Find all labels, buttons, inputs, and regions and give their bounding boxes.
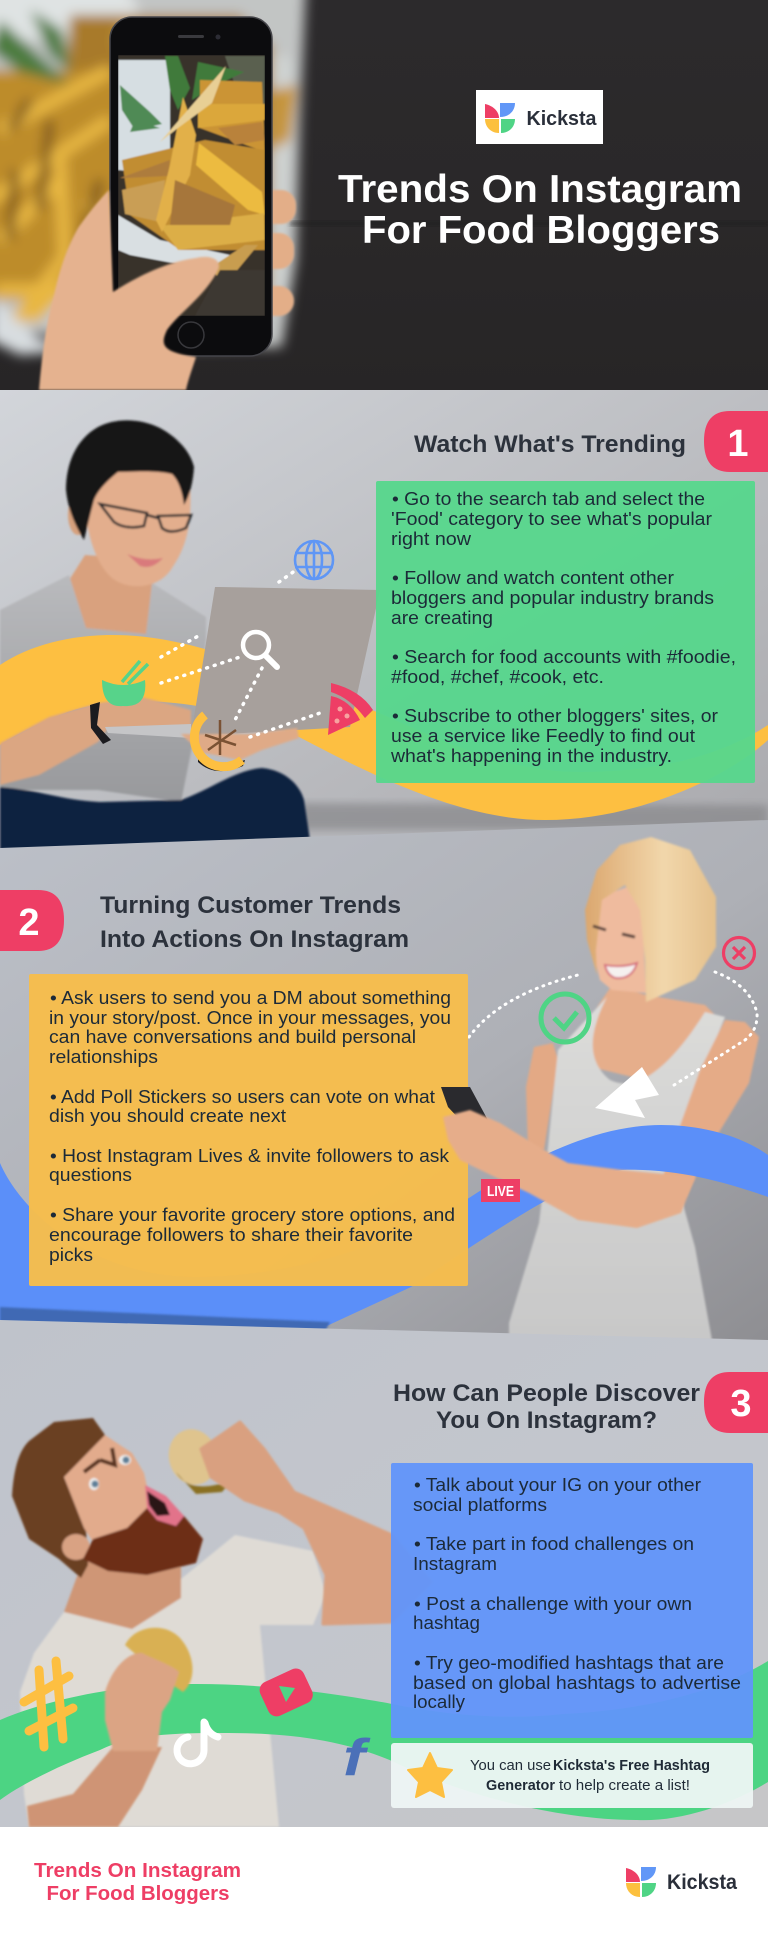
text box: green tips: use a service like Feedly to find out	[391, 726, 695, 746]
wrist band	[198, 755, 245, 771]
raised arm and hand	[201, 1422, 431, 1624]
irises	[92, 1456, 130, 1488]
icon: pizza slice	[328, 683, 373, 735]
text box: yellow tips: • Host Instagram Lives & invite followers to ask	[50, 1146, 450, 1166]
text box: green tips: are creating	[391, 608, 493, 628]
badge number 1	[704, 411, 768, 472]
woman smile	[605, 963, 637, 978]
text box: green tips: • Follow and watch content other	[392, 568, 674, 588]
phone	[110, 17, 272, 356]
badge number 3	[704, 1372, 768, 1433]
text box: green tips: • Search for food accounts with #foodie,	[392, 647, 736, 667]
text box: yellow tips: dish you should create next	[49, 1106, 286, 1126]
yellow wave	[0, 635, 768, 820]
jeans	[0, 768, 310, 860]
eyes	[89, 1455, 131, 1490]
callout text: Kicksta's Free Hashtag	[553, 1758, 710, 1774]
LIVE tag	[481, 1179, 520, 1202]
icon: star	[408, 1753, 452, 1797]
phone speaker and camera	[178, 35, 204, 38]
woman top	[509, 997, 725, 1340]
hand holding phone	[39, 190, 219, 390]
footer title	[34, 1860, 241, 1905]
woman left arm	[526, 1043, 558, 1150]
forearm	[27, 1747, 162, 1827]
text box: blue tips: hashtag	[413, 1613, 480, 1633]
section 3 background	[0, 1320, 768, 1830]
text box: blue tips: • Talk about your IG on your other	[414, 1475, 701, 1495]
text box: yellow tips: • Share your favorite grocery store options, and	[50, 1205, 455, 1225]
neck and chest	[66, 555, 154, 640]
text box: green tips: bloggers and popular industry brands	[391, 588, 714, 608]
heading: How Can People Discover	[393, 1380, 700, 1407]
shirt	[0, 575, 206, 802]
panel: section 1 watch what's trending	[0, 390, 768, 860]
text box: blue tips	[391, 1463, 753, 1738]
blurred plate of fries	[0, 0, 306, 355]
text box: blue tips: based on global hashtags to advertise	[413, 1673, 741, 1693]
phone body	[110, 17, 272, 356]
panel: section 2 customer trends	[0, 820, 768, 1345]
photo: woman body	[509, 837, 759, 1340]
badge number 1: 1	[727, 423, 749, 465]
phone screen with fries photo	[118, 55, 265, 316]
logo card	[476, 90, 603, 144]
text box: blue tips: Instagram	[413, 1554, 497, 1574]
other hand under laptop	[181, 728, 299, 760]
woman neck and chest	[575, 985, 720, 1085]
lower burger and hand	[27, 1628, 192, 1827]
text box: yellow tips: relationships	[49, 1047, 158, 1067]
text box: blue tips: • Try geo-modified hashtags that are	[414, 1653, 724, 1673]
text box: green tips: • Go to the search tab and select the	[392, 489, 705, 509]
logo wordmark: Kicksta	[526, 108, 597, 130]
blue wave	[0, 1125, 768, 1345]
icon: facebook f: f	[343, 1729, 371, 1787]
woman forearm and hand	[443, 1110, 695, 1228]
heading	[393, 1380, 700, 1434]
text box: green tips: 'Food' category to see what's popular	[391, 509, 712, 529]
woman upper arm	[656, 1020, 759, 1197]
icon: video play	[257, 1666, 316, 1719]
icon: globe	[295, 541, 333, 579]
text box: green tips	[376, 481, 755, 783]
wood plank seam	[290, 221, 768, 226]
panel: footer	[0, 1827, 768, 1934]
photo: bearded man	[12, 1418, 326, 1827]
footer background	[0, 1827, 768, 1934]
callout: hashtag generator	[391, 1743, 753, 1808]
text box: yellow tips: can have conversations and build personal	[49, 1027, 416, 1047]
panel: section 3 discover	[0, 1320, 768, 1830]
arm and hand on keyboard	[0, 697, 191, 785]
text box: yellow tips: encourage followers to share their favorite	[49, 1225, 413, 1245]
text box: yellow tips: in your story/post. Once in your messages, you	[49, 1008, 451, 1028]
neck	[64, 1560, 181, 1629]
green wave	[0, 1661, 768, 1820]
text box: blue tips: • Post a challenge with your own	[414, 1594, 692, 1614]
wristband	[90, 702, 111, 744]
icon: cross circle	[724, 938, 754, 968]
burger top	[163, 1424, 232, 1494]
hand	[105, 1653, 179, 1751]
ear	[68, 495, 88, 535]
ear	[62, 1534, 90, 1560]
callout text	[470, 1758, 710, 1794]
icon: bowl with chopsticks	[102, 661, 148, 706]
section 1 background	[0, 390, 768, 860]
dotted connector lines	[161, 570, 323, 737]
icon: music note	[177, 1722, 218, 1764]
eyebrows	[84, 1448, 115, 1472]
LIVE tag: LIVE	[487, 1183, 514, 1200]
text box: green tips: right now	[391, 529, 472, 549]
icon: lemon slice	[194, 715, 242, 767]
shirt	[20, 1535, 326, 1827]
photo: man torso and head	[0, 420, 310, 860]
smartphone in hand	[441, 1087, 497, 1138]
hair	[12, 1418, 105, 1578]
text box: green tips: what's happening in the industry.	[390, 746, 672, 766]
face	[82, 458, 190, 586]
footer Kicksta logo	[626, 1867, 737, 1897]
open mouth	[145, 1485, 184, 1526]
woman hair	[585, 837, 716, 1002]
text box: yellow tips	[29, 974, 468, 1286]
laptop	[105, 587, 380, 738]
title	[338, 168, 742, 252]
text box: blue tips: locally	[413, 1692, 465, 1712]
woman face	[590, 887, 646, 993]
badge number 3: 3	[730, 1383, 752, 1425]
text box: green tips: #food, #chef, #cook, etc.	[391, 667, 604, 687]
laptop base	[105, 724, 191, 738]
panel: header	[0, 0, 768, 390]
laptop lid	[191, 587, 380, 736]
heading: Watch What's Trending	[414, 431, 686, 458]
heading	[100, 892, 409, 953]
text box: blue tips: • Take part in food challenges on	[414, 1534, 694, 1554]
icon: magnifier	[243, 632, 277, 667]
callout text: Generator	[486, 1778, 555, 1794]
mouth interior	[147, 1491, 170, 1516]
icon: fingers behind phone	[258, 190, 296, 316]
wave shadow strip	[0, 1307, 330, 1345]
header dark wood background	[0, 0, 768, 390]
text box: yellow tips: • Ask users to send you a DM about something	[50, 988, 451, 1008]
heading: Turning Customer Trends	[100, 892, 401, 919]
footer title: Trends On Instagram	[34, 1860, 241, 1882]
badge number 2: 2	[18, 902, 40, 944]
mouth	[127, 554, 163, 567]
text box: yellow tips: picks	[49, 1245, 93, 1265]
icon: send arrow	[595, 1067, 659, 1118]
heading: You On Instagram?	[436, 1407, 657, 1434]
callout text: You can use	[470, 1758, 551, 1774]
text box: blue tips: social platforms	[413, 1495, 547, 1515]
glasses	[100, 504, 191, 532]
hair	[66, 420, 194, 540]
footer title: For Food Bloggers	[46, 1883, 229, 1905]
face	[64, 1435, 150, 1542]
dotted arcs	[469, 972, 757, 1087]
text box: green tips: • Subscribe to other bloggers' sites, or	[392, 706, 718, 726]
icon: Kicksta logo mark	[485, 103, 515, 133]
woman eyes	[593, 926, 635, 937]
callout text: to help create a list!	[559, 1778, 690, 1794]
icon: hashtag	[24, 1661, 73, 1747]
icon: check circle	[541, 994, 589, 1042]
text box: yellow tips: • Add Poll Stickers so users can vote on what	[50, 1087, 435, 1107]
footer Kicksta logo: Kicksta	[667, 1871, 737, 1894]
title: Trends On Instagram	[338, 168, 742, 211]
section 2 background	[0, 820, 768, 1345]
heading: Into Actions On Instagram	[100, 926, 409, 953]
beard	[83, 1490, 203, 1575]
phone home button	[178, 322, 204, 348]
title: For Food Bloggers	[362, 209, 720, 252]
text box: yellow tips: questions	[49, 1165, 132, 1185]
burger	[125, 1628, 192, 1692]
floor shadow band	[300, 803, 768, 830]
badge number 2	[0, 890, 64, 951]
